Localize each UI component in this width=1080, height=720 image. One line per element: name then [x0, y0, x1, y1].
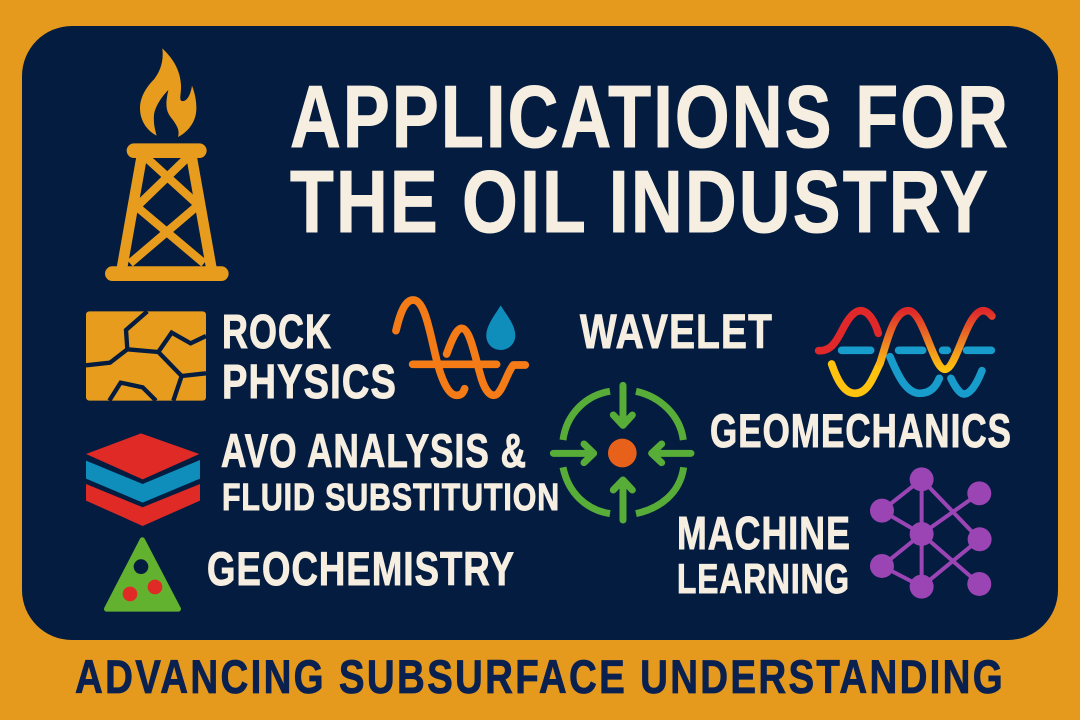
label: machine learning: MACHINE [677, 507, 851, 559]
icon: stress target [553, 385, 691, 520]
label: avo analysis and fluid substitution: AVO ANALYSIS & [221, 424, 527, 477]
label: machine learning: LEARNING [677, 555, 850, 602]
icon: wave and droplet [396, 300, 525, 395]
title [290, 67, 1010, 251]
label: rock physics [222, 306, 397, 409]
icon: cracked rock [86, 311, 206, 401]
label: avo analysis and fluid substitution [221, 424, 560, 519]
label: avo analysis and fluid substitution: FLUID SUBSTITUTION [222, 477, 560, 519]
label: machine learning [677, 507, 851, 602]
label: wavelet: WAVELET [580, 306, 773, 359]
icon: ternary triangle [107, 540, 178, 609]
label: rock physics: ROCK [222, 306, 332, 359]
icon: layered strata [86, 433, 200, 526]
icon: neural network [870, 467, 992, 599]
label: rock physics: PHYSICS [222, 356, 397, 409]
icon: oil derrick with flame [105, 48, 229, 281]
icon: interfering wavelets [819, 311, 992, 394]
label: geochemistry: GEOCHEMISTRY [207, 542, 515, 595]
